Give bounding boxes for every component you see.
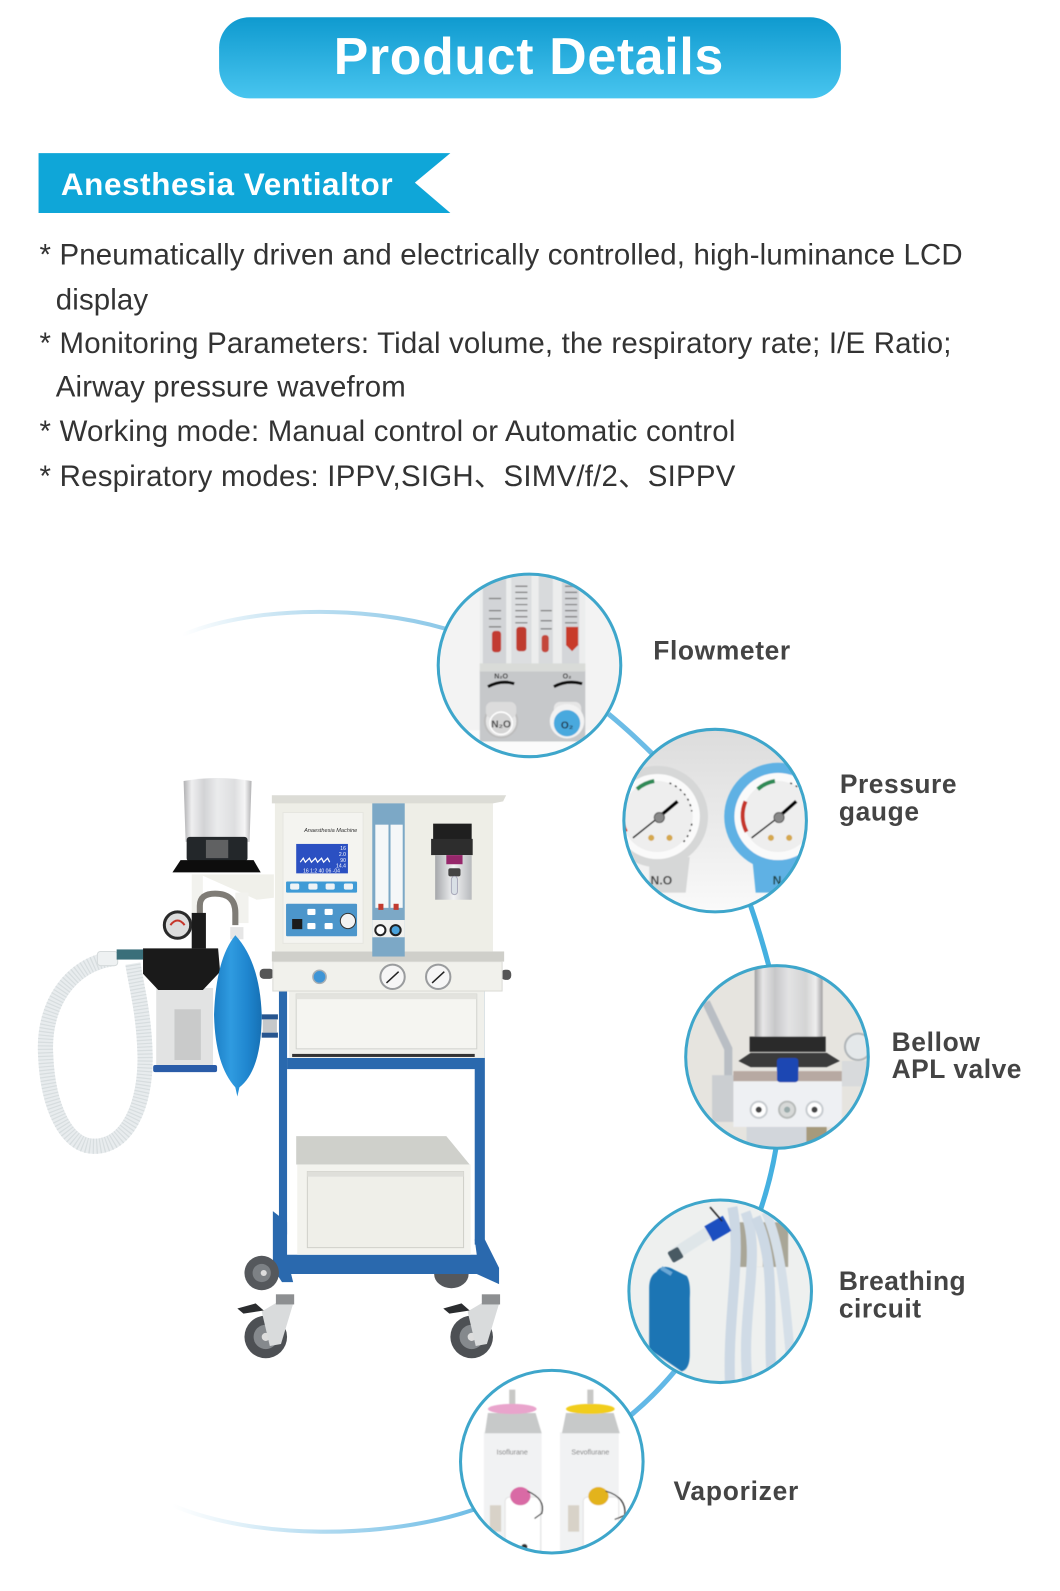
title: Product Details: Product Details — [334, 27, 723, 85]
detail circle: vaporizer: Isoflurane — [497, 1449, 528, 1457]
label: Breathing circuit — [839, 1266, 966, 1324]
detail circle: vaporizer — [461, 1370, 643, 1554]
connecting arc between detail circles — [172, 612, 776, 1532]
text block: feature list: * Pneumatically driven and electrically controlled, high-luminance LCD — [40, 239, 963, 272]
detail circle: pressure gauge: N.O — [651, 874, 672, 888]
detail circle: flowmeter: O₂ — [561, 720, 573, 731]
LCD screen: 14.4 — [336, 863, 346, 869]
detail circle: flowmeter — [436, 572, 622, 758]
label: Bellow APL valve — [892, 1027, 1021, 1084]
LCD screen: 90 — [340, 858, 346, 864]
label: Pressure gauge: Pressure — [840, 769, 957, 799]
top drawer — [289, 991, 485, 1058]
label: Vaporizer: Vaporizer — [674, 1476, 798, 1506]
heading banner: Anesthesia Ventialtor — [39, 153, 450, 213]
detail circle: breathing circuit — [629, 1200, 811, 1390]
LCD screen: 16 1:2 40 06 -04 — [303, 868, 340, 874]
bellows housing — [172, 778, 274, 923]
label: Pressure gauge — [839, 769, 957, 827]
title: Product Details — [219, 17, 841, 98]
small vaporizer — [431, 824, 473, 900]
LCD screen: 2.0 — [339, 852, 346, 858]
reservoir bag — [214, 927, 262, 1097]
text block: feature list: * Working mode: Manual control or Automatic control — [40, 415, 735, 448]
text block: feature list: Airway pressure wavefrom — [56, 371, 406, 404]
illustration: anesthesia machine — [45, 778, 511, 1358]
lower storage box — [296, 1136, 471, 1255]
detail circle: bellow APL valve — [686, 964, 872, 1152]
control buttons — [286, 881, 357, 936]
detail circle: flowmeter: O₂ — [563, 673, 571, 681]
text block: feature list — [40, 239, 963, 493]
detail circle: vaporizer: Sevoflurane — [571, 1449, 609, 1457]
absorber assembly — [117, 894, 235, 1072]
text block: feature list: * Monitoring Parameters: Tidal volume, the respiratory rate; I/E Ratio; — [40, 327, 951, 360]
detail circle: flowmeter: N₂O — [491, 719, 511, 730]
corrugated breathing hose — [45, 951, 145, 1146]
label: Bellow APL valve: Bellow — [892, 1027, 980, 1057]
label: Bellow APL valve: APL valve — [892, 1054, 1021, 1084]
label: Pressure gauge: gauge — [839, 797, 919, 827]
LCD screen: 16 — [340, 846, 346, 852]
blue frame — [262, 991, 499, 1284]
label: Breathing circuit: Breathing — [839, 1266, 966, 1296]
LCD screen — [296, 844, 348, 874]
casters — [237, 1256, 500, 1358]
table top with gauges — [260, 951, 511, 991]
detail circle: flowmeter: N₂O — [494, 673, 508, 681]
text block: feature list: display — [56, 283, 148, 316]
detail circle: pressure gauge: N — [773, 874, 781, 888]
machine head — [272, 795, 506, 957]
label: Breathing circuit: circuit — [839, 1294, 921, 1324]
flowmeter column — [372, 803, 405, 957]
heading banner: Anesthesia Ventialtor: Anesthesia Ventialtor — [61, 167, 393, 202]
label: Flowmeter: Flowmeter — [653, 635, 790, 665]
machine head: Anaesthesia Machine — [303, 828, 357, 834]
detail circle: pressure gauge — [622, 728, 808, 914]
text block: feature list: * Respiratory modes: IPPV,SIGH、SIMV/f/2、SIPPV — [40, 460, 736, 493]
